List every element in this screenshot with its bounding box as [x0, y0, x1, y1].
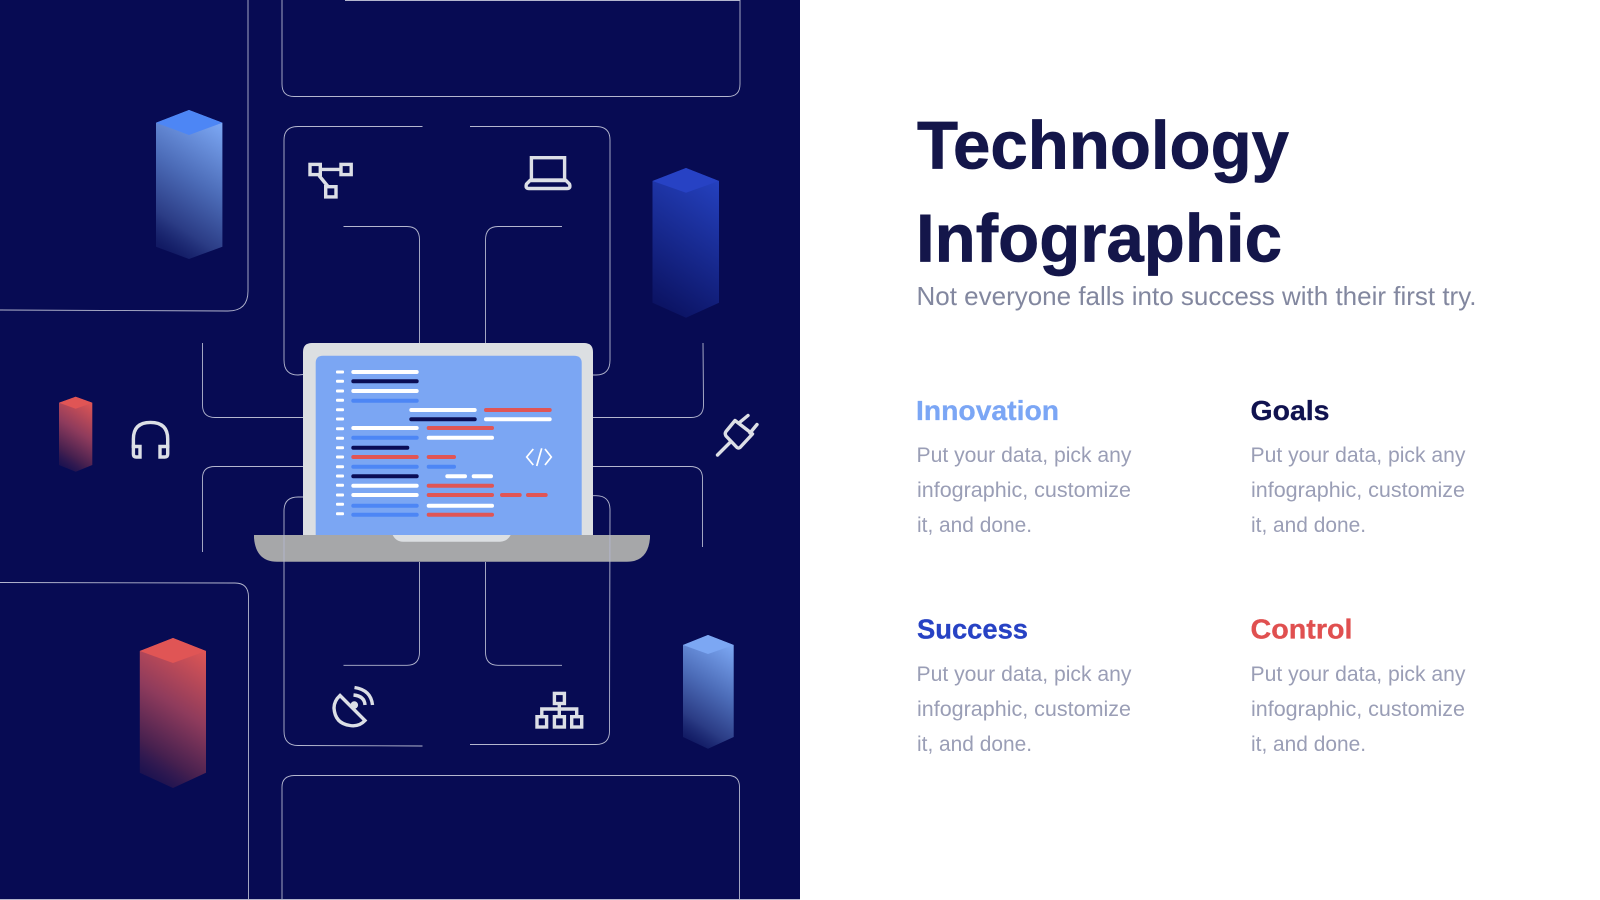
bar: royal blue	[652, 168, 719, 318]
code lines	[336, 370, 552, 517]
red code bars	[351, 408, 552, 517]
title: Technology	[917, 107, 1289, 183]
bar: pale blue	[683, 635, 734, 749]
icon: power plug	[718, 416, 757, 455]
blue code bars	[351, 399, 456, 517]
laptop screen	[316, 356, 582, 535]
block: Goals: Put your data, pick any	[1250, 444, 1466, 467]
panel: navy illustration background	[0, 0, 800, 899]
white code bars	[351, 370, 552, 508]
block: Success: Success	[917, 613, 1028, 644]
circuit lines in front of the laptop	[284, 496, 610, 746]
icon: headphones	[133, 422, 168, 457]
icon: organisation tree	[537, 693, 582, 727]
icon: code brackets	[527, 448, 551, 466]
block: Control: Control	[1250, 613, 1352, 644]
block: Goals	[1250, 395, 1466, 537]
block: Goals: infographic, customize	[1251, 479, 1465, 502]
block: Goals: Goals	[1250, 395, 1330, 426]
icon: laptop outline	[526, 158, 570, 188]
circuit lines behind the laptop	[0, 0, 740, 899]
navy code bars	[351, 379, 477, 478]
title	[916, 107, 1289, 277]
bar: light blue tall	[156, 110, 222, 259]
block: Control: it, and done.	[1251, 733, 1366, 756]
block: Innovation: Put your data, pick any	[916, 444, 1132, 467]
title: Infographic	[916, 201, 1282, 277]
laptop notch	[393, 535, 511, 542]
bar: small red	[59, 397, 92, 472]
block: Goals: it, and done.	[1251, 514, 1366, 537]
line ticks	[336, 370, 344, 515]
icon: satellite dish	[334, 688, 372, 726]
block: Innovation	[916, 395, 1132, 537]
block: Success: it, and done.	[917, 733, 1032, 756]
block: Innovation: Innovation	[916, 395, 1059, 426]
laptop illustration	[254, 343, 650, 562]
block: Innovation: it, and done.	[917, 514, 1032, 537]
block: Innovation: infographic, customize	[917, 479, 1131, 502]
laptop base	[254, 535, 650, 562]
bar: large red	[140, 638, 206, 788]
laptop lid	[303, 343, 593, 535]
block: Control	[1250, 613, 1466, 756]
block: Control: infographic, customize	[1251, 698, 1465, 721]
subtitle: Not everyone falls into success with their first try.	[916, 281, 1476, 311]
icon: node graph	[310, 164, 351, 197]
block: Success: Put your data, pick any	[916, 663, 1132, 686]
block: Success: infographic, customize	[917, 698, 1131, 721]
block: Control: Put your data, pick any	[1250, 663, 1466, 686]
block: Success	[916, 613, 1132, 756]
